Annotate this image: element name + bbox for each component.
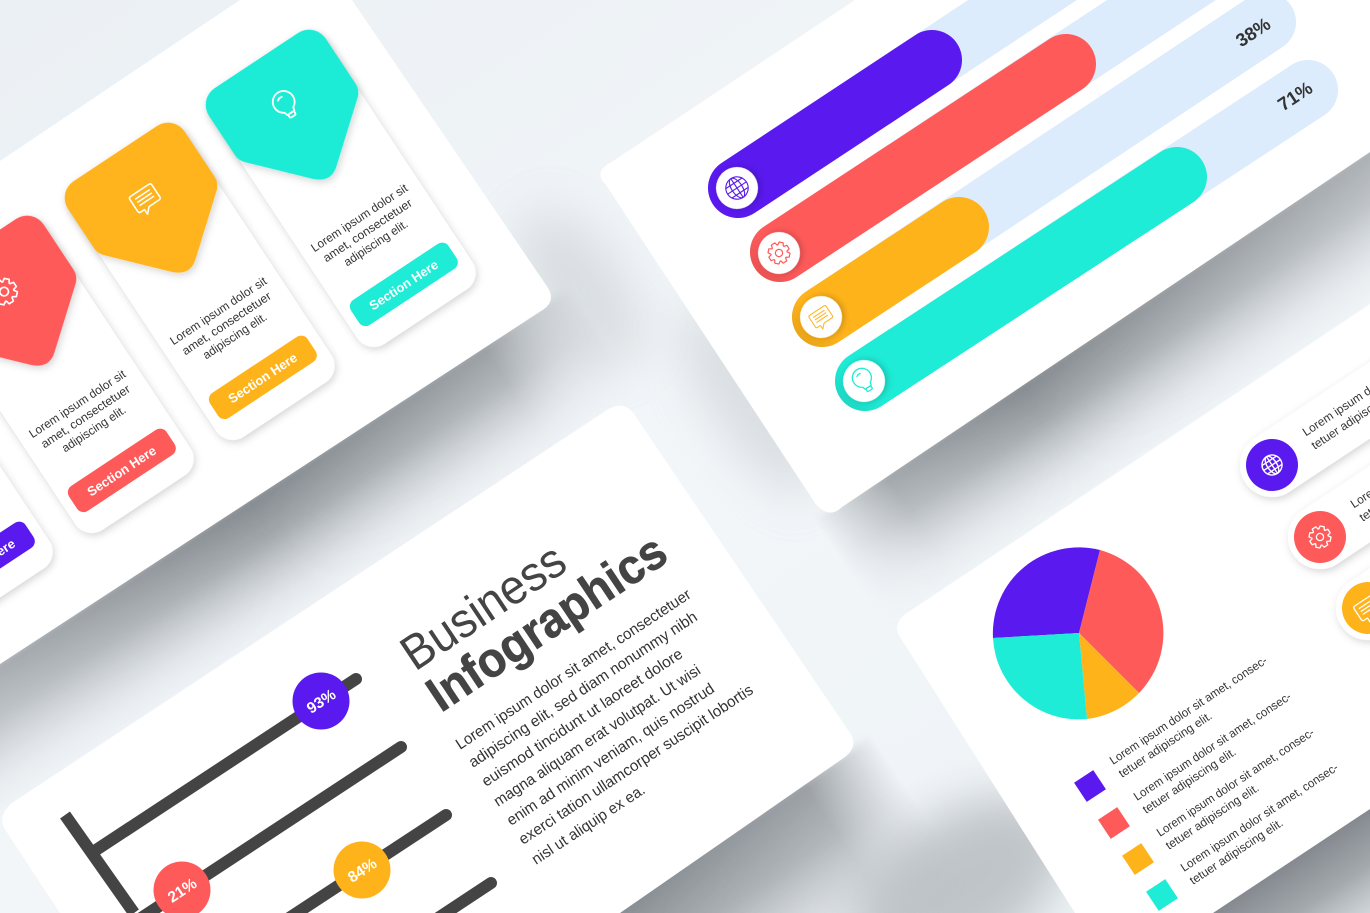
- panel background: bars: [600, 0, 1370, 513]
- pie chart: [993, 547, 1163, 719]
- marker: 93%: [292, 672, 350, 730]
- card: red: Section Here: [84, 443, 159, 499]
- bar: purple: [738, 60, 932, 188]
- card: yellow: [57, 115, 343, 448]
- body text: euismod tincidunt ut laoreet dolore: [479, 646, 686, 790]
- panel: title and line chart: [2, 406, 853, 913]
- shadow under bars panel: [823, 152, 1370, 576]
- card: red: [0, 208, 202, 541]
- card: purple: [0, 305, 60, 634]
- legend row 2: [1098, 689, 1294, 839]
- legend row 1: Lorem ipsum dolor sit amet, consec-: [1107, 653, 1270, 768]
- panel background: title: [2, 406, 853, 913]
- card: teal: amet, consectetuer: [320, 196, 415, 265]
- legend row 2: tetuer adipiscing elit.: [1140, 745, 1239, 817]
- card: red: adipiscing elit.: [59, 403, 129, 455]
- body text: Lorem ipsum dolor sit amet, consectetuer: [453, 586, 694, 753]
- card: red: amet, consectetuer: [38, 382, 133, 451]
- legend row 4: tetuer adipiscing elit.: [1187, 816, 1286, 888]
- legend: [1074, 653, 1341, 911]
- soft shadow: right of cards panel corner: [493, 190, 667, 390]
- bar: teal: [865, 177, 1177, 381]
- card: teal: adipiscing elit.: [341, 217, 411, 269]
- cap shade: teal: [835, 351, 895, 411]
- marker: 21%: 21%: [165, 875, 200, 906]
- track 2: [780, 0, 1222, 252]
- card: red: Lorem ipsum dolor sit: [26, 367, 129, 441]
- pill: gear: [1276, 362, 1370, 581]
- marker: 21%: [154, 862, 210, 913]
- panel background: pie: [897, 304, 1370, 913]
- card: yellow: Lorem ipsum dolor sit: [167, 274, 270, 348]
- body text: adipiscing elit, sed diam nonummy nibh: [466, 609, 701, 771]
- legend row 4: [1146, 760, 1341, 911]
- cap shade: red: [750, 222, 810, 282]
- body text: [453, 586, 757, 868]
- marker: 84%: [334, 842, 390, 898]
- marker: 93%: 93%: [304, 686, 339, 717]
- soft shadow: between title and pie panels: [821, 760, 1099, 913]
- card: teal: Lorem ipsum dolor sit: [308, 181, 411, 255]
- shadow under pie panel: [1122, 580, 1370, 913]
- legend row 2: Lorem ipsum dolor sit amet, consec-: [1131, 689, 1294, 804]
- heading: Infographics: Infographics: [417, 524, 677, 722]
- body text: magna aliquam erat volutpat. Ut wisi: [491, 662, 704, 810]
- chart: lollipop lines: [65, 679, 491, 913]
- body text: exerci tation ullamcorper suscipit lobortis: [516, 682, 757, 848]
- marker: 84%: 84%: [345, 855, 380, 886]
- icon: gear badge: [750, 224, 808, 282]
- panel background: cards: [0, 0, 551, 664]
- legend row 3: [1122, 725, 1317, 875]
- shadow under cards panel: [0, 296, 588, 789]
- card: teal: Section Here: [366, 257, 441, 313]
- body text: enim ad minim veniam, quis nostrud: [504, 680, 718, 829]
- card: yellow: amet, consectetuer: [179, 289, 274, 358]
- track 4: [865, 90, 1308, 381]
- legend row 3: tetuer adipiscing elit.: [1163, 781, 1262, 853]
- panel: pie chart: [897, 290, 1370, 913]
- value: 38%: 38%: [1232, 13, 1274, 51]
- pill: chat: [1324, 433, 1370, 652]
- legend row 1: tetuer adipiscing elit.: [1116, 709, 1215, 781]
- cap shade: yellow: [792, 287, 852, 347]
- icon: bulb badge: [835, 352, 893, 410]
- shadow under title panel: [620, 742, 908, 913]
- track 1: [738, 0, 1180, 188]
- icon: globe badge: [708, 159, 766, 217]
- icon: chat badge: [792, 288, 850, 346]
- track 3: [822, 22, 1266, 317]
- soft shadow: left of bars panel: [656, 286, 844, 514]
- legend row 4: Lorem ipsum dolor sit amet, consec-: [1178, 760, 1341, 875]
- legend row 1: [1074, 653, 1270, 802]
- panel: cards: [0, 0, 551, 664]
- value: 71%: 71%: [1274, 77, 1316, 115]
- body text: nisl ut aliquip ex ea.: [529, 781, 648, 868]
- card: yellow: Section Here: [225, 350, 300, 406]
- pill: globe: [1228, 290, 1370, 509]
- legend row 3: Lorem ipsum dolor sit amet, consec-: [1154, 725, 1317, 840]
- bar: red: [780, 64, 1066, 252]
- card: yellow: adipiscing elit.: [200, 310, 270, 362]
- bar: yellow: [822, 227, 959, 317]
- heading: Business: Business: [391, 533, 576, 681]
- panel: progress bars: [600, 0, 1370, 513]
- card: teal: [198, 22, 484, 355]
